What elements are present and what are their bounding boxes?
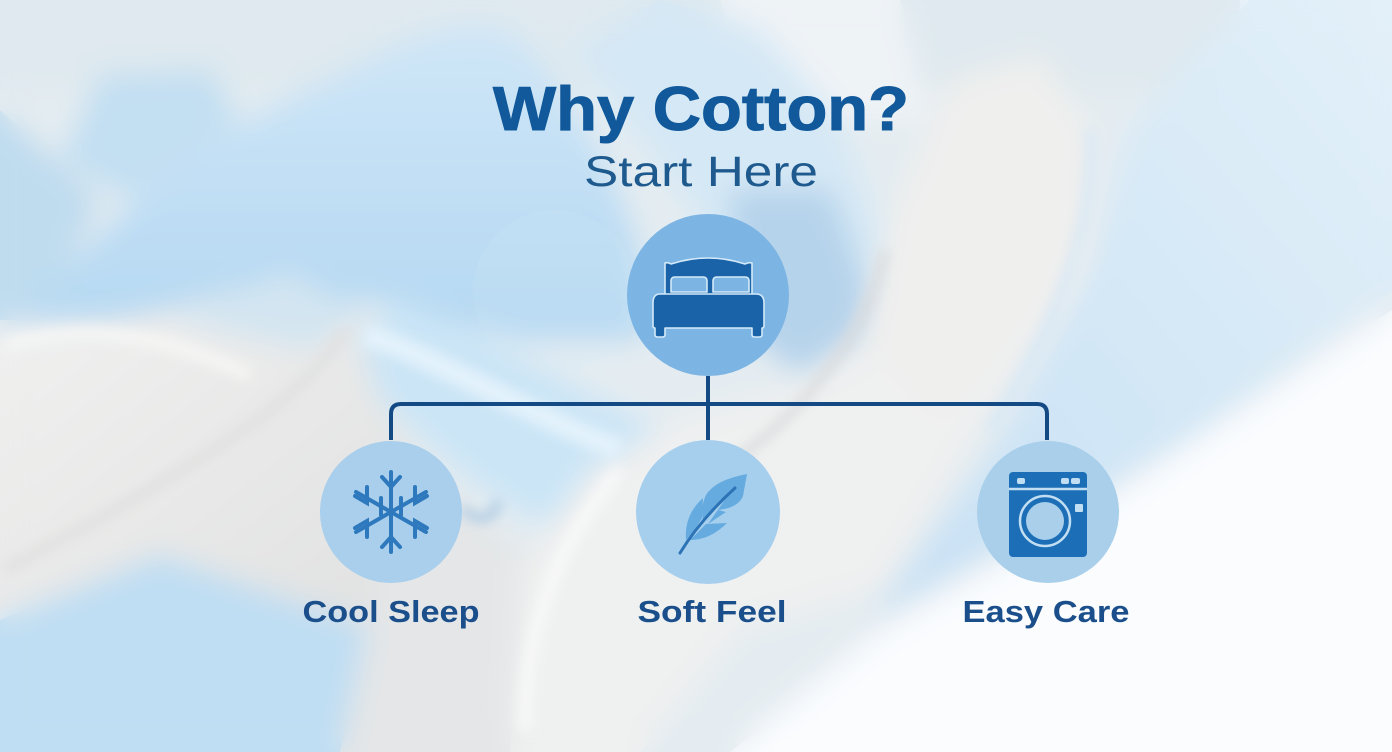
label: cool sleep: Cool Sleep — [302, 594, 480, 629]
label: soft feel: Soft Feel — [638, 594, 786, 629]
node: soft feel — [636, 440, 780, 584]
title: Why Cotton? — [493, 75, 909, 144]
icon: washing machine — [1009, 472, 1087, 557]
label: easy care: Easy Care — [962, 594, 1130, 629]
icon: bed — [653, 258, 764, 337]
icon: snowflake — [355, 472, 427, 552]
node: cool sleep — [320, 441, 462, 583]
node: bed — [627, 214, 789, 376]
connector lines — [391, 376, 1047, 440]
faint lighter disc — [473, 210, 637, 374]
icon: feather — [680, 474, 747, 553]
subtitle: Start Here — [584, 148, 818, 196]
node: easy care — [977, 441, 1119, 583]
